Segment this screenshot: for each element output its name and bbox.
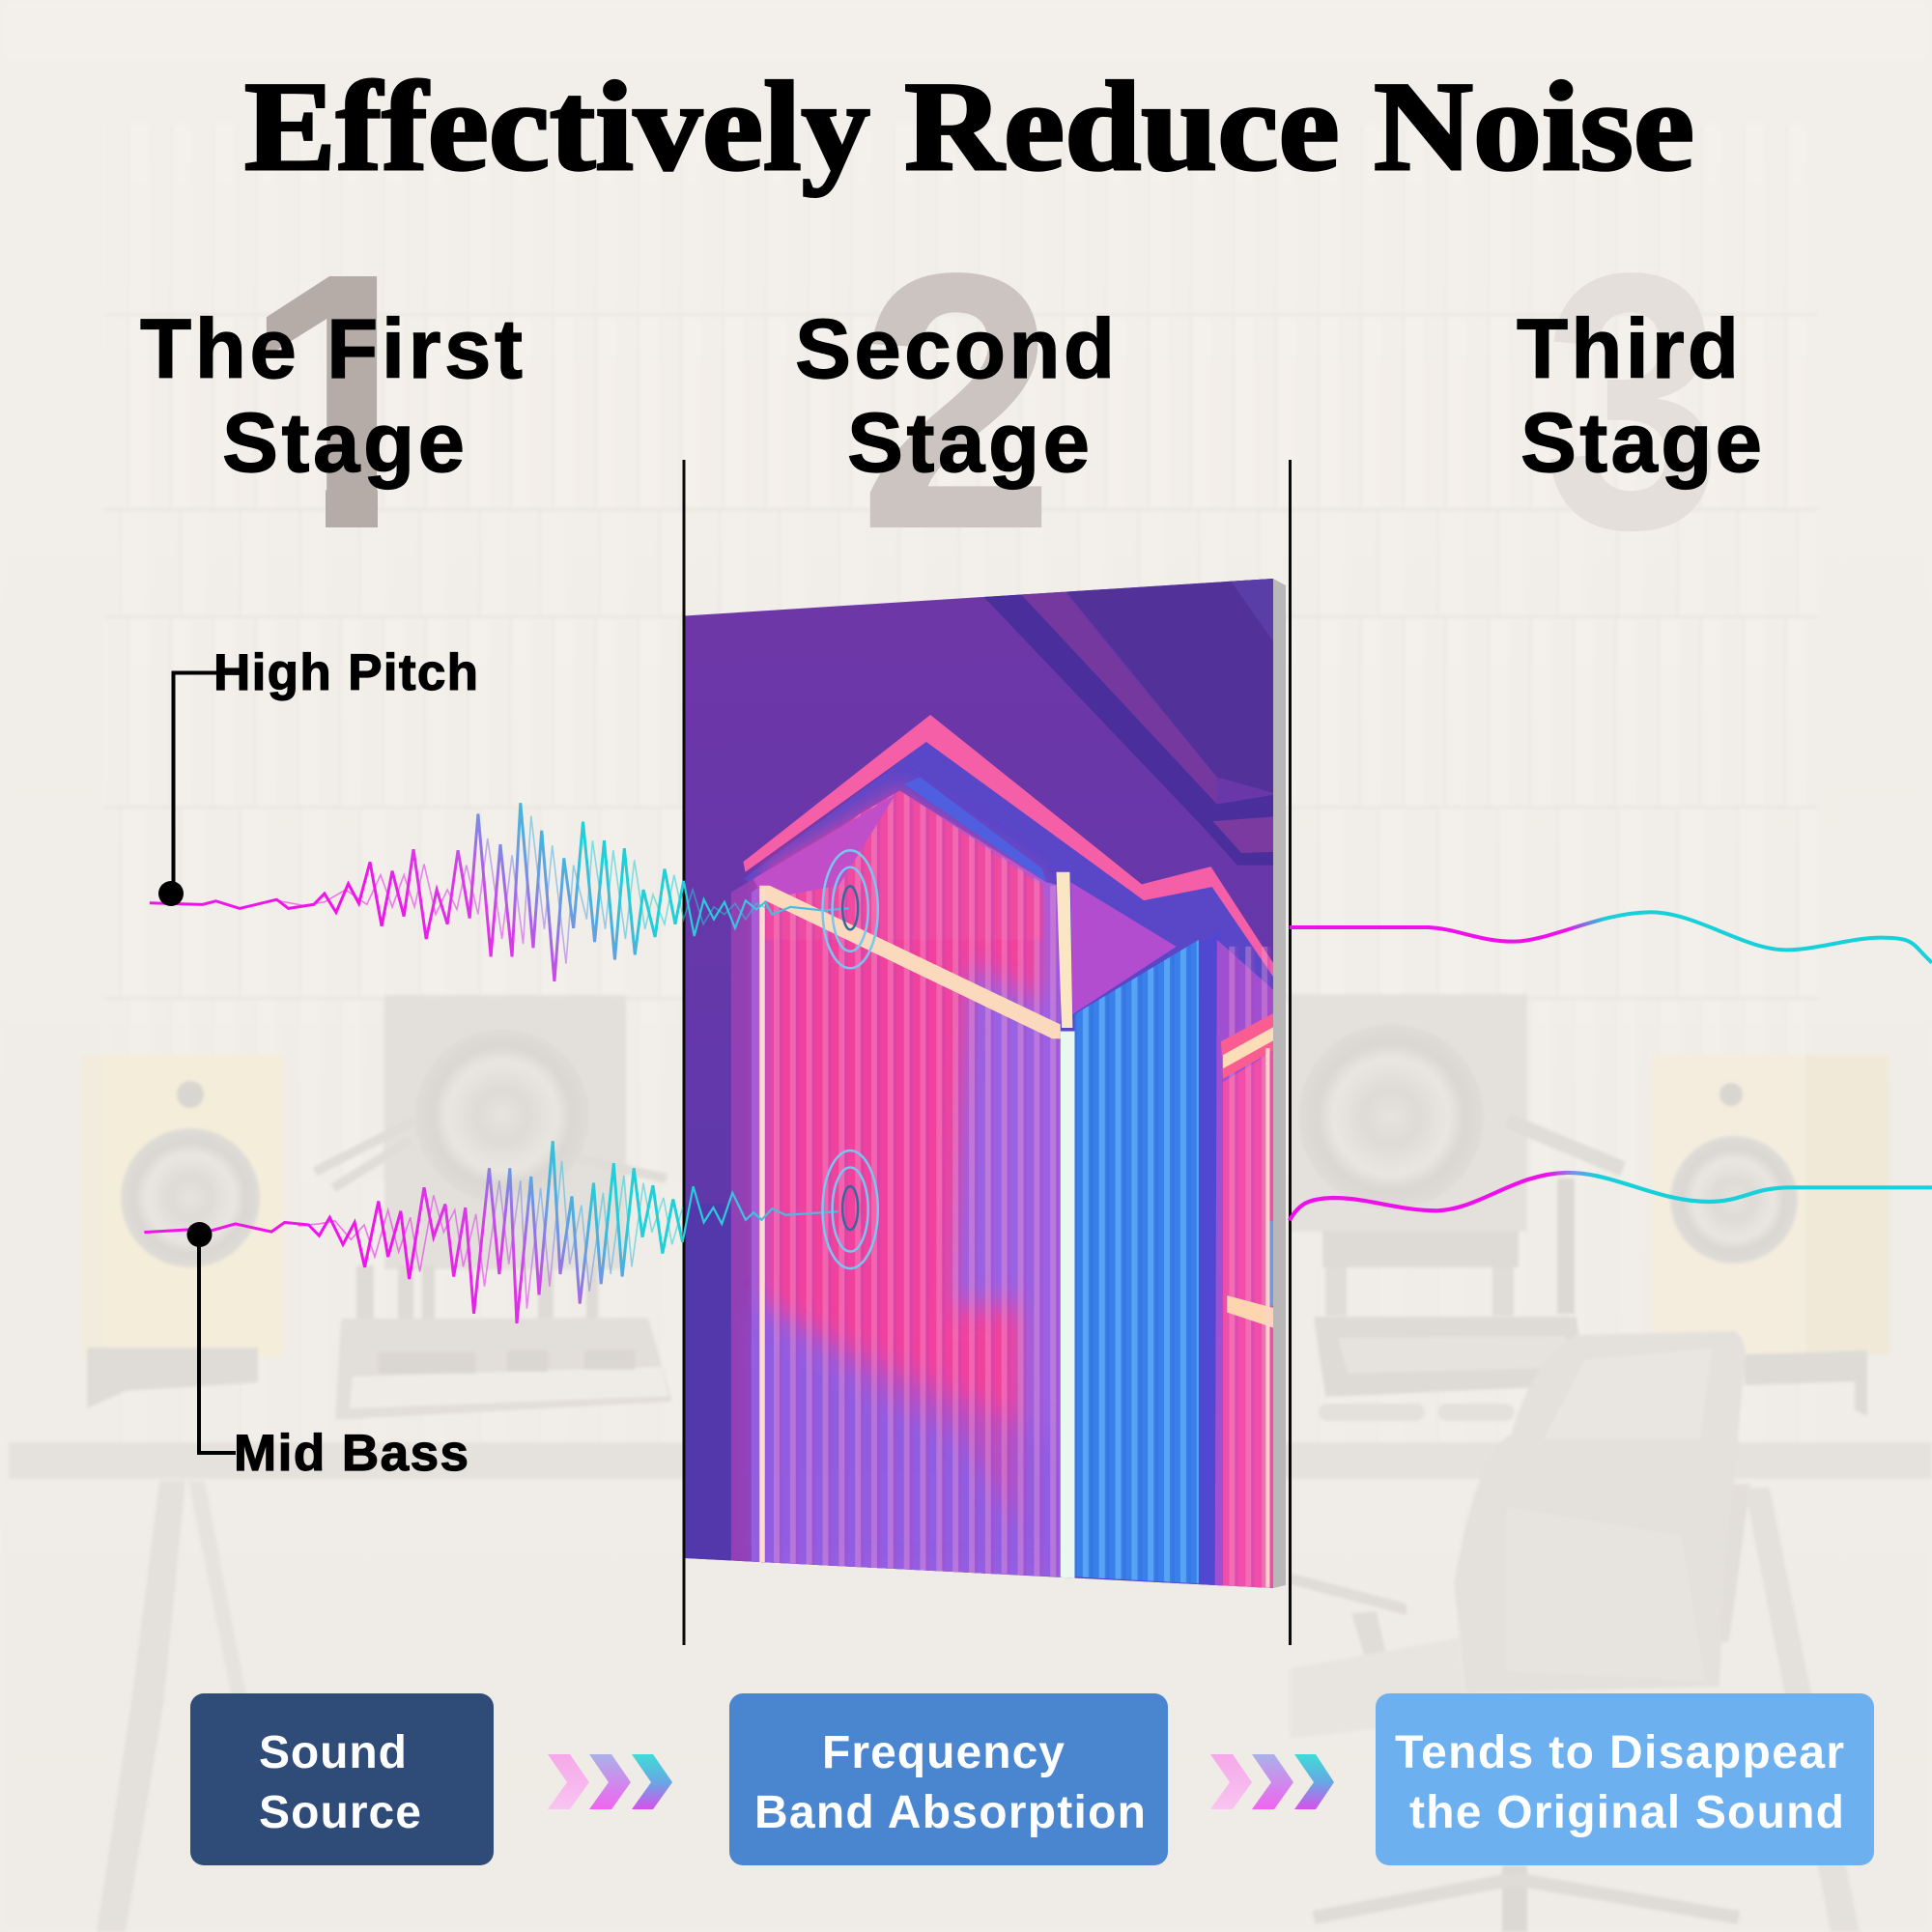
- step box: frequency band absorption: Band Absorption: [754, 1787, 1146, 1838]
- waveform: mid bass: [144, 1141, 838, 1323]
- arrows: first chevrons: [548, 1754, 672, 1809]
- left studio monitor: [315, 995, 667, 1320]
- callout: high pitch: High Pitch: [213, 644, 478, 701]
- clean wave: third stage upper: [1290, 912, 1932, 963]
- absorption rings: high pitch: [823, 850, 878, 968]
- white post: [1057, 872, 1072, 1028]
- heading: the first stage: The First: [140, 302, 523, 396]
- arrows: second chevrons: [1210, 1754, 1334, 1809]
- step box: sound source: Sound: [259, 1727, 407, 1778]
- absorption rings: mid bass: [823, 1151, 878, 1268]
- left yellow speaker: [81, 1055, 283, 1408]
- callout: mid bass: [187, 1222, 469, 1482]
- panel: neon acoustic panel: [676, 560, 1286, 1597]
- heading: the first stage: [140, 302, 523, 490]
- front wall: [731, 791, 1061, 1577]
- blue wall: [1074, 931, 1221, 1587]
- right yellow speaker: [1652, 1055, 1889, 1416]
- right keyboard: [1314, 1317, 1584, 1421]
- step box: sound source: [190, 1693, 494, 1865]
- big number 1: 1: [242, 198, 444, 606]
- office chair: [1290, 1331, 1746, 1932]
- title: Effectively Reduce Noise: [244, 55, 1694, 197]
- heading: second stage: Stage: [847, 396, 1090, 490]
- step box: tends to disappear: the Original Sound: [1409, 1787, 1844, 1838]
- left keyboard: [335, 1318, 672, 1420]
- cream beam: [759, 886, 1061, 1038]
- right studio monitor: [1290, 994, 1623, 1316]
- step box: tends to disappear: Tends to Disappear: [1395, 1727, 1844, 1778]
- step box: tends to disappear: [1376, 1693, 1874, 1865]
- heading: third stage: Stage: [1520, 396, 1762, 490]
- heading: the first stage: Stage: [222, 396, 465, 490]
- callout: mid bass: Mid Bass: [234, 1425, 469, 1482]
- stage divider left: [682, 460, 686, 1645]
- waveform: high pitch: [150, 803, 849, 981]
- panel side edge: [1273, 579, 1286, 1588]
- clean wave: third stage lower: [1290, 1173, 1932, 1220]
- right wall: [1215, 940, 1278, 1590]
- big number 3: 3: [1543, 198, 1722, 606]
- heading: third stage: Third: [1517, 302, 1739, 396]
- stage divider right: [1289, 460, 1292, 1645]
- callout: high pitch: [158, 644, 478, 906]
- step box: frequency band absorption: [729, 1693, 1168, 1865]
- heading: third stage: [1517, 302, 1762, 490]
- big number 2: 2: [858, 198, 1056, 606]
- lilac triangle: [1070, 882, 1177, 1014]
- heading: second stage: Second: [795, 302, 1115, 396]
- step box: sound source: Source: [259, 1787, 421, 1838]
- step box: frequency band absorption: Frequency: [822, 1727, 1065, 1778]
- soffit: [744, 742, 1273, 1032]
- heading: second stage: [795, 302, 1115, 490]
- desk and legs: [9, 1442, 1932, 1479]
- roof band: [743, 715, 1278, 983]
